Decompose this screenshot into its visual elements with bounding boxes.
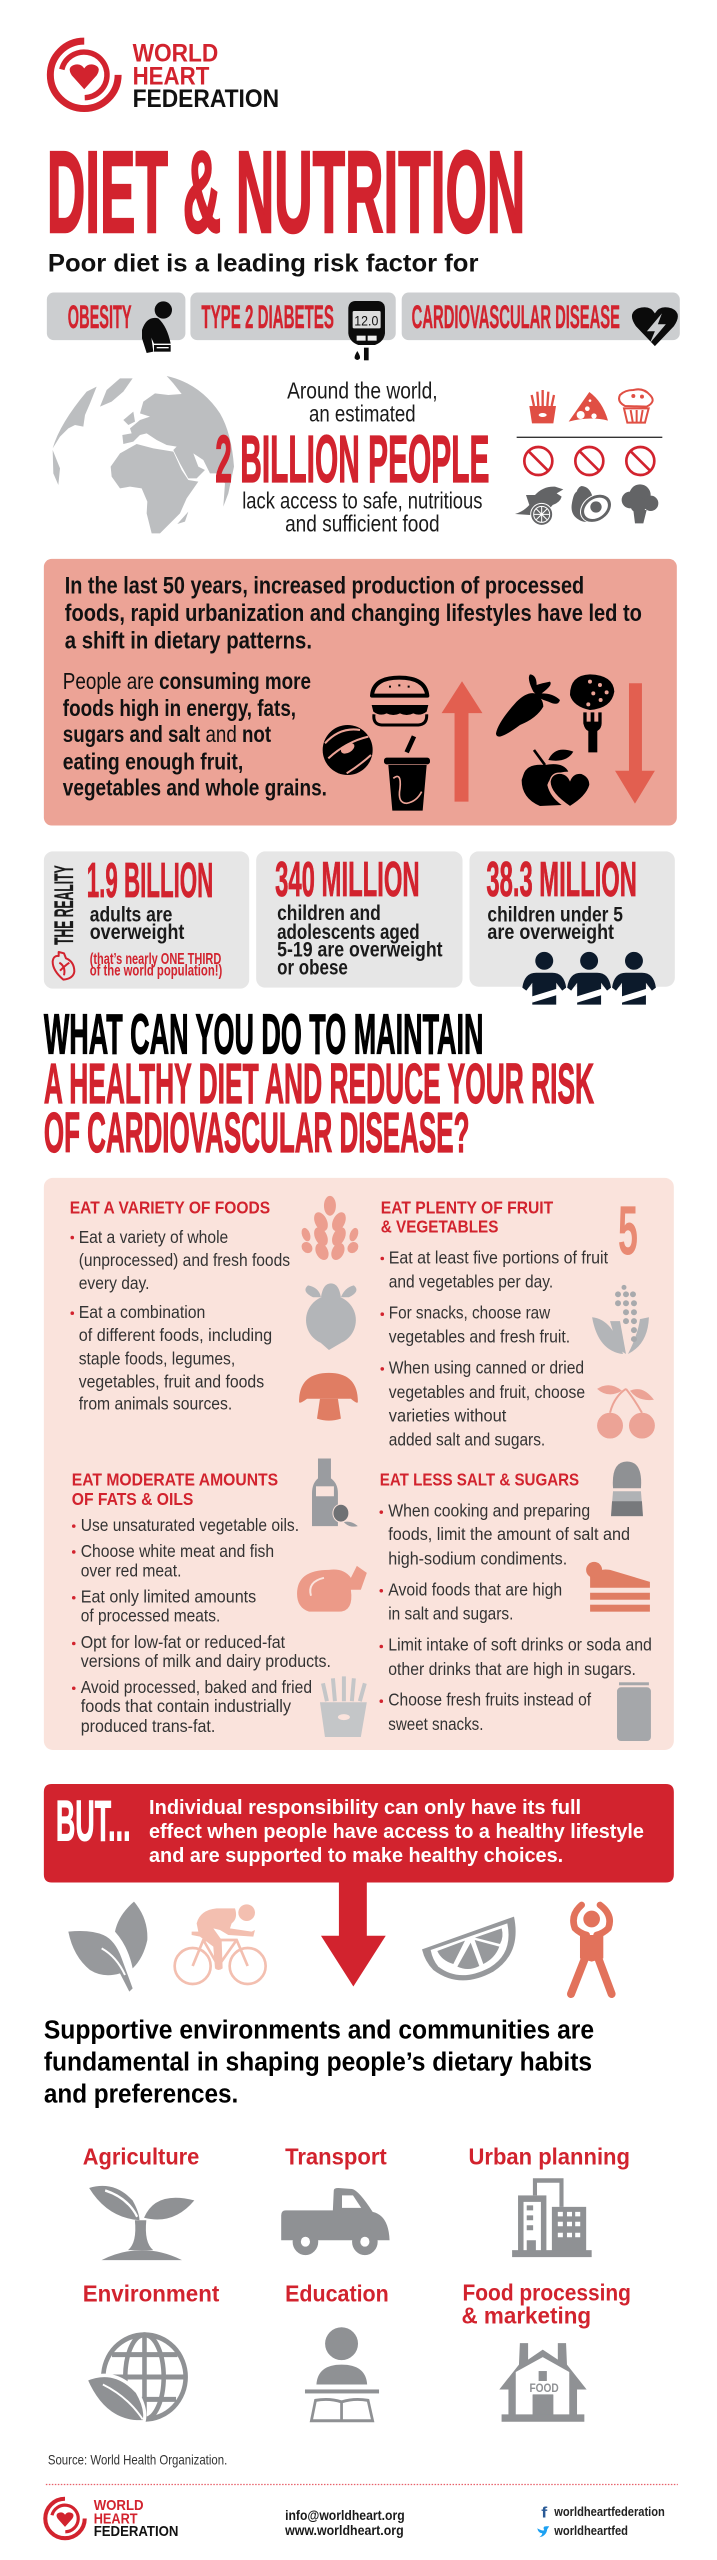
icons: junk food versus healthy food	[515, 389, 662, 528]
text: shift in dietary patterns: In the last 50 years, increased production of processed	[65, 573, 584, 600]
icon: glucose meter: 12.0	[354, 313, 379, 329]
sector: education: Education	[285, 2280, 389, 2306]
icon: apple and heart	[522, 750, 590, 807]
advice: eat moderate amounts of fats and oils: Eat only limited amounts	[81, 1587, 256, 1607]
icon: citrus slice	[422, 1917, 516, 1980]
sector: food processing and marketing: & marketing	[462, 2302, 591, 2328]
advice: eat moderate amounts of fats and oils: Opt for low-fat or reduced-fat	[81, 1632, 285, 1652]
advice: eat plenty of fruit and vegetables: varieties without	[389, 1406, 507, 1426]
arrow: down	[615, 683, 655, 804]
advice: eat less salt and sugars: Choose fresh fruits instead of	[388, 1690, 591, 1710]
logo wordmark	[133, 41, 279, 113]
logo mark	[50, 41, 118, 109]
sector: food processing and marketing	[462, 2279, 631, 2422]
advice: eat less salt and sugars: EAT LESS SALT & SUGARS	[380, 1469, 579, 1489]
pill: obesity	[47, 293, 185, 340]
advice: eat moderate amounts of fats and oils: foods that contain industrially	[81, 1696, 291, 1716]
logo wordmark: HEART	[133, 63, 209, 90]
sector: urban planning: Urban planning	[468, 2144, 630, 2170]
icon: soda can	[617, 1682, 651, 1741]
footer wordmark: FEDERATION	[94, 2523, 178, 2540]
social links	[537, 2504, 665, 2538]
icons: prohibition signs	[524, 447, 654, 475]
icon: anatomical heart	[53, 952, 74, 980]
risk factor pills	[47, 293, 680, 346]
advice: eat a variety of foods: (unprocessed) and fresh foods	[79, 1250, 290, 1270]
sector: agriculture	[83, 2144, 199, 2260]
advice: eat moderate amounts of fats and oils: produced trans-fat.	[81, 1716, 215, 1736]
advice: eat plenty of fruit and vegetables: and vegetables per day.	[389, 1271, 553, 1291]
stat: 1.9 billion: adults are	[90, 903, 173, 927]
footer logo mark	[45, 2499, 85, 2538]
stat: 38.3 million: children under 5	[487, 903, 623, 927]
text: consuming more: vegetables and whole grains.	[63, 775, 327, 801]
advice: eat a variety of foods: EAT A VARIETY OF FOODS	[70, 1198, 270, 1218]
sector: food processing and marketing: Food processing	[463, 2279, 631, 2305]
icon: cyclist	[175, 1904, 266, 1984]
pill: cardiovascular disease	[402, 293, 680, 340]
icon: roast chicken	[297, 1566, 367, 1612]
advice: eat moderate amounts of fats and oils: OF FATS & OILS	[72, 1489, 193, 1509]
text: consuming more: sugars and salt and not	[63, 721, 271, 747]
text: supportive environments: Supportive environments and communities are	[44, 2017, 594, 2045]
header: logo, title and risk factors	[47, 41, 680, 346]
icon: burger	[372, 678, 428, 725]
icon: strawberry on fork	[570, 674, 614, 752]
advice: eat a variety of foods	[70, 1198, 290, 1414]
text: supportive environments	[44, 2017, 594, 2108]
stat: 340 million: adolescents aged	[277, 920, 420, 944]
advice: eat moderate amounts of fats and oils: versions of milk and dairy products.	[81, 1651, 331, 1671]
stat: 340 million	[256, 851, 463, 988]
subheading: Poor diet is a leading risk factor for	[48, 251, 479, 278]
text: 2 billion people	[215, 378, 489, 537]
text: 2 billion people: an estimated	[309, 401, 416, 426]
sector: environment	[83, 2280, 220, 2422]
text: shift in dietary patterns: a shift in dietary patterns.	[65, 627, 312, 654]
logo wordmark: FEDERATION	[133, 86, 279, 113]
sector: environment: Environment	[83, 2280, 220, 2306]
world globe	[53, 376, 234, 533]
banner: but: BUT...	[56, 1790, 131, 1854]
sector grid	[83, 2144, 631, 2422]
icon: corn	[592, 1285, 649, 1354]
divider line	[517, 435, 662, 439]
text: supportive environments: fundamental in shaping people’s dietary habits	[44, 2049, 592, 2077]
sector: education	[285, 2280, 389, 2421]
text: shift in dietary patterns	[65, 573, 642, 654]
stat: 38.3 million	[469, 851, 675, 1005]
advice: eat plenty of fruit and vegetables: When using canned or dried	[389, 1358, 584, 1377]
advice: eat a variety of foods: Eat a variety of whole	[79, 1227, 228, 1247]
text: consuming more: foods high in energy, fats,	[63, 695, 296, 721]
icon: avocado	[572, 486, 617, 528]
advice: eat moderate amounts of fats and oils	[72, 1469, 331, 1736]
text: consuming more: People are consuming more	[63, 668, 311, 694]
stat: 340 million: children and	[277, 901, 381, 925]
advice: eat moderate amounts of fats and oils: Choose white meat and fish	[81, 1541, 274, 1561]
advice: eat moderate amounts of fats and oils: Avoid processed, baked and fried	[81, 1677, 312, 1697]
contact details: info@worldheart.org	[285, 2507, 405, 2523]
advice: eat less salt and sugars: When cooking and preparing	[388, 1501, 590, 1521]
heading: what can you do	[44, 1003, 594, 1165]
sector: food processing and marketing: FOOD	[529, 2383, 559, 2395]
icon: french fries	[320, 1676, 367, 1737]
icon: oil bottle and olives	[312, 1458, 358, 1527]
stat: 1.9 billion: 1.9 BILLION	[87, 854, 213, 908]
stat: 340 million: 5-19 are overweight	[277, 937, 443, 961]
icon: fish and lemon	[515, 487, 563, 525]
stat: 1.9 billion: overweight	[90, 920, 184, 944]
logo wordmark: WORLD	[133, 41, 218, 67]
advice: eat moderate amounts of fats and oils: of processed meats.	[81, 1606, 220, 1626]
advice: eat plenty of fruit and vegetables: & VEGETABLES	[381, 1217, 498, 1237]
icon: carrot	[496, 674, 560, 737]
icons: foods to reduce and increase	[323, 674, 614, 811]
section: dietary shift panel, statistics and question heading	[44, 559, 677, 1165]
icon: salt shaker	[611, 1461, 643, 1516]
advice: eat less salt and sugars: Limit intake of soft drinks or soda and	[388, 1634, 652, 1654]
advice: eat a variety of foods: vegetables, fruit and foods	[79, 1371, 264, 1391]
stat: 340 million: 340 MILLION	[275, 853, 420, 907]
sector: transport: Transport	[285, 2144, 387, 2170]
social links: worldheartfed	[553, 2524, 628, 2538]
arrow: up	[442, 681, 482, 802]
banner: but: Individual responsibility can only have its full	[149, 1797, 581, 1819]
advice: eat moderate amounts of fats and oils: EAT MODERATE AMOUNTS	[72, 1469, 278, 1489]
advice: eat less salt and sugars: foods, limit the amount of salt and	[388, 1524, 630, 1544]
contact details	[284, 2507, 405, 2538]
icon: donut	[323, 725, 373, 775]
stat: 340 million: or obese	[277, 956, 348, 980]
panel: healthy diet advice	[44, 1178, 674, 1750]
advice: eat a variety of foods: from animals sources.	[79, 1394, 232, 1414]
advice: eat plenty of fruit and vegetables	[380, 1198, 608, 1450]
advice: eat a variety of foods: of different foods, including	[79, 1325, 272, 1345]
text: 2 billion people: lack access to safe, nutritious	[242, 488, 482, 514]
sector: transport	[281, 2144, 390, 2255]
pill: obesity: OBESITY	[68, 298, 132, 335]
icon: mushroom	[299, 1373, 358, 1421]
icon: cherries	[597, 1385, 655, 1439]
advice: eat a variety of foods: staple foods, legumes,	[79, 1348, 235, 1368]
advice: eat plenty of fruit and vegetables: Eat at least five portions of fruit	[389, 1247, 608, 1267]
advice: eat plenty of fruit and vegetables: vegetables and fruit, choose	[389, 1382, 585, 1402]
banner: but: and are supported to make healthy choices.	[149, 1845, 563, 1867]
advice: eat plenty of fruit and vegetables: For snacks, choose raw	[389, 1303, 551, 1323]
icons: three children with tape	[522, 952, 656, 1005]
icon: leaves	[68, 1902, 147, 1992]
advice: eat plenty of fruit and vegetables: added salt and sugars.	[389, 1430, 545, 1450]
text: consuming more	[63, 668, 327, 801]
stat: 38.3 million: are overweight	[487, 920, 614, 944]
icon: fries	[529, 390, 556, 423]
pill: type 2 diabetes	[190, 293, 396, 340]
icon: wheat	[299, 1196, 361, 1262]
icon: broccoli	[622, 484, 658, 523]
stat: 1.9 billion: of the world population!)	[90, 963, 222, 980]
section: supportive environments	[44, 2017, 678, 2540]
footer wordmark	[94, 2497, 178, 2540]
contact details: www.worldheart.org	[284, 2522, 404, 2538]
advice: eat a variety of foods: Eat a combination	[79, 1302, 205, 1322]
sector: agriculture: Agriculture	[83, 2144, 199, 2170]
advice: eat less salt and sugars: other drinks that are high in sugars.	[388, 1659, 636, 1679]
icon: obese person	[142, 301, 172, 353]
advice: eat a variety of foods: every day.	[79, 1273, 150, 1293]
icon: glucose meter	[348, 301, 385, 360]
advice: eat less salt and sugars	[379, 1469, 652, 1734]
social links: f	[541, 2504, 547, 2521]
advice: eat moderate amounts of fats and oils: Use unsaturated vegetable oils.	[81, 1515, 299, 1535]
icon: number five: 5	[618, 1192, 638, 1269]
icon: broken heart	[632, 307, 678, 346]
banner: but: effect when people have access to a healthy lifestyle	[149, 1821, 644, 1843]
icon: exercising person	[571, 1905, 612, 1994]
pill: type 2 diabetes: TYPE 2 DIABETES	[201, 298, 334, 335]
icons: healthy lifestyle row	[68, 1902, 612, 1994]
advice: eat less salt and sugars: high-sodium condiments.	[388, 1549, 567, 1569]
advice: eat plenty of fruit and vegetables: EAT PLENTY OF FRUIT	[381, 1198, 553, 1218]
footer wordmark: WORLD	[94, 2497, 144, 2514]
icon: beetroot	[305, 1283, 356, 1350]
stat: 1.9 billion: (that’s nearly ONE THIRD	[90, 951, 221, 968]
logo: World Heart Federation	[50, 41, 279, 113]
icon: pizza	[569, 392, 608, 422]
panel: dietary shift	[44, 559, 677, 826]
social links: worldheartfederation	[553, 2505, 665, 2519]
banner: but	[44, 1784, 674, 1986]
advice: eat less salt and sugars: in salt and sugars.	[388, 1604, 513, 1624]
advice: eat moderate amounts of fats and oils: over red meat.	[81, 1560, 181, 1580]
advice: eat less salt and sugars: Avoid foods that are high	[388, 1580, 562, 1600]
stat: 1.9 billion: THE REALITY	[49, 865, 79, 945]
sector: urban planning	[468, 2144, 630, 2257]
text: consuming more: eating enough fruit,	[63, 748, 243, 774]
icon: cake slice	[586, 1562, 650, 1612]
icon: soda cup	[384, 736, 430, 811]
stat: 1.9 billion	[44, 851, 249, 989]
footer wordmark: HEART	[94, 2510, 138, 2527]
advice: eat less salt and sugars: sweet snacks.	[388, 1714, 483, 1734]
text: 2 billion people: and sufficient food	[285, 511, 440, 537]
icon: muffin	[619, 389, 653, 423]
advice: eat plenty of fruit and vegetables: vegetables and fresh fruit.	[389, 1327, 570, 1347]
text: 2 billion people: Around the world,	[287, 378, 438, 404]
text: supportive environments: and preferences.	[44, 2080, 238, 2108]
source: Source: World Health Organization.	[48, 2452, 227, 2468]
